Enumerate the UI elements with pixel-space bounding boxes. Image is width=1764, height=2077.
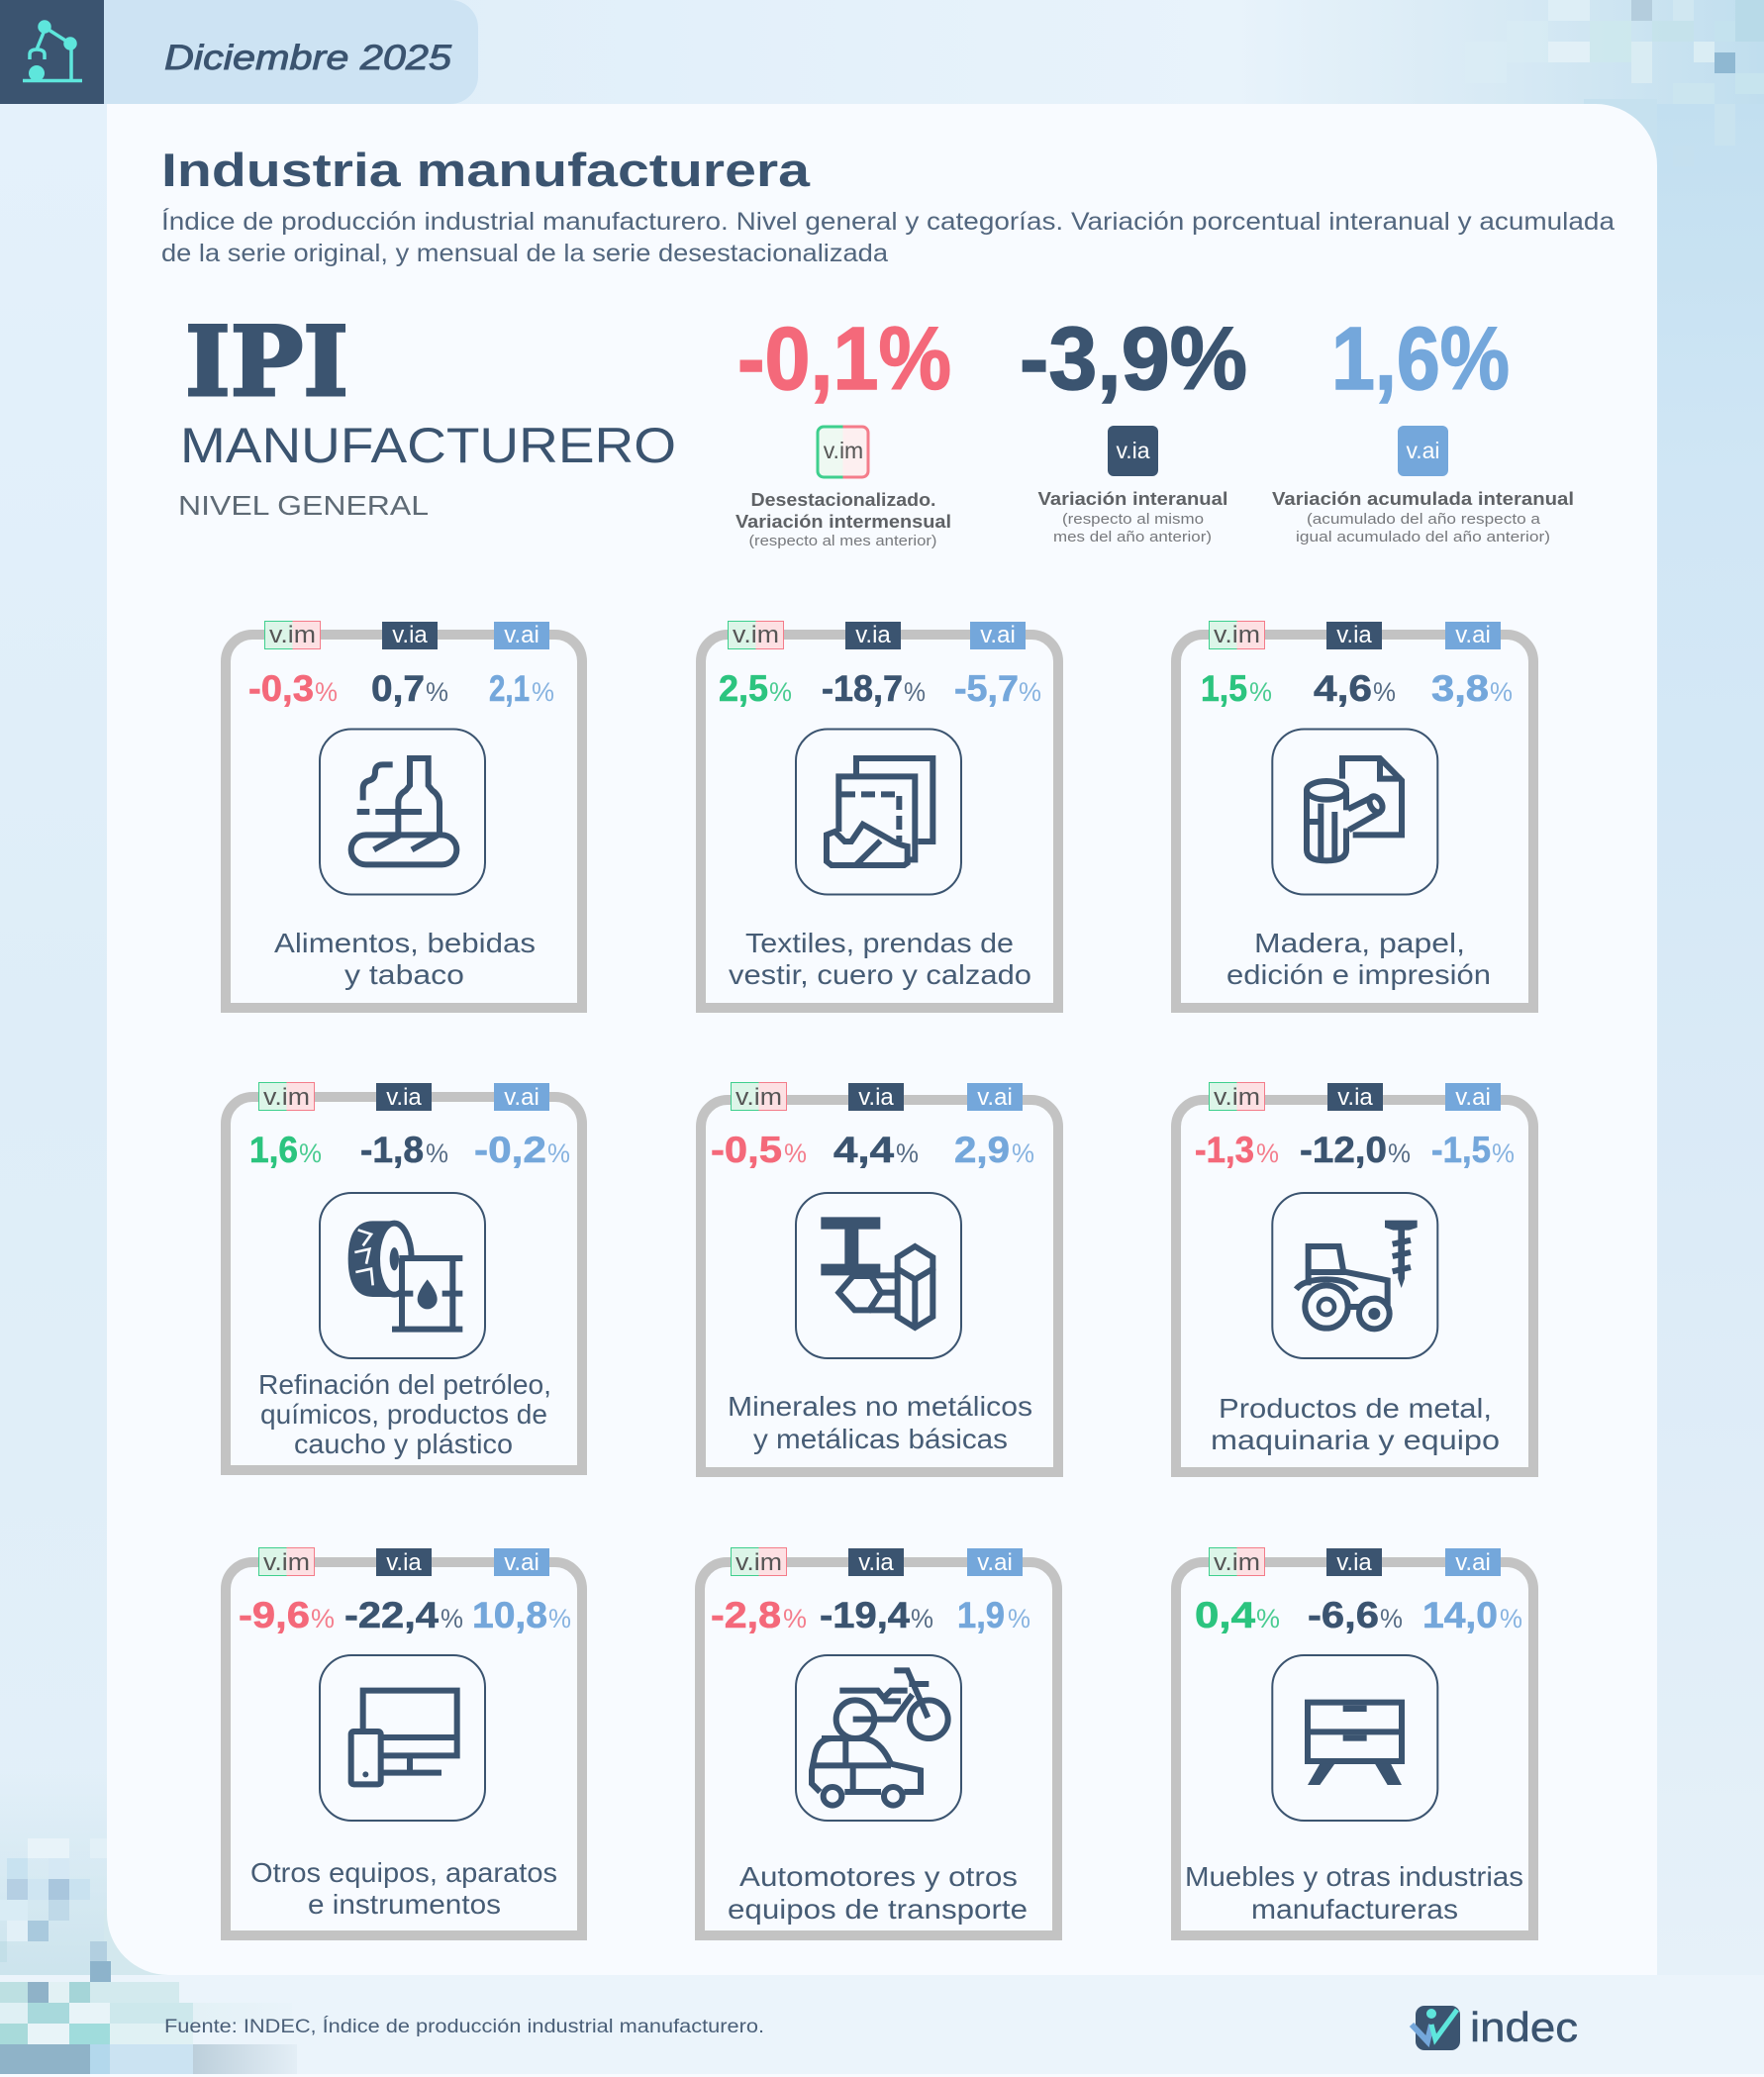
headline indicator: v.ai: Variación acumulada interanual: [1272, 489, 1574, 509]
values: -1,5: [1431, 1130, 1491, 1170]
values: %: [1490, 677, 1513, 707]
label: y metálicas básicas: [753, 1424, 1008, 1454]
values: 2,9: [954, 1130, 1010, 1170]
label: [274, 928, 536, 990]
headline indicator: v.im: Desestacionalizado.: [750, 490, 936, 510]
panel: Textiles, prendas de vestir, cuero y calzado: [701, 622, 1058, 1008]
values: %: [1249, 677, 1272, 707]
label: vestir, cuero y calzado: [729, 959, 1031, 990]
values: %: [1012, 1138, 1034, 1168]
values: [1195, 1595, 1522, 1635]
values: [248, 668, 554, 709]
values: %: [1373, 677, 1396, 707]
label: y tabaco: [344, 959, 464, 990]
badges: v.ai: [977, 1084, 1013, 1111]
badges: [731, 1548, 1023, 1576]
values: %: [1256, 1604, 1280, 1633]
label: [258, 1369, 551, 1459]
icon: motorcycle and car: [796, 1655, 961, 1821]
values: 3,8: [1431, 668, 1489, 709]
values: %: [315, 677, 338, 707]
values: -5,7: [954, 668, 1019, 709]
headline indicator: v.ia: mes del año anterior): [1053, 529, 1212, 545]
subtitle: de la serie original, y mensual de la serie desestacionalizada: [161, 240, 888, 267]
badges: v.ia: [386, 1084, 422, 1111]
values: 2,1: [489, 668, 530, 709]
badges: [1210, 1548, 1501, 1576]
values: [711, 1595, 1030, 1635]
headline indicator: v.ia: (respecto al mismo: [1062, 511, 1204, 528]
panel: Refinación del petróleo: [226, 1083, 582, 1470]
values: [249, 1130, 570, 1170]
panel: Madera, papel, edición e impresión: [1176, 622, 1533, 1008]
label: Productos de metal,: [1219, 1393, 1492, 1424]
values: 0,7: [371, 668, 425, 709]
headline indicator: v.ia: Variación interanual: [1037, 489, 1227, 509]
label: Alimentos, bebidas: [274, 928, 536, 958]
label: Automotores y otros: [739, 1861, 1018, 1892]
badges: v.ai: [504, 1549, 539, 1576]
badges: v.ia: [855, 622, 891, 648]
values: %: [1256, 1138, 1279, 1168]
badges: [1210, 1083, 1501, 1111]
icon: tractor and screw: [1272, 1193, 1437, 1358]
values: -1,8: [360, 1130, 424, 1170]
label: Otros equipos, aparatos: [250, 1857, 557, 1888]
values: %: [426, 1138, 448, 1168]
logo: indec: indec: [1470, 2004, 1578, 2050]
values: [719, 668, 1041, 709]
heading: IPI manufacturero nivel general: [178, 306, 676, 521]
values: %: [532, 677, 554, 707]
badges: v.ai: [1455, 622, 1491, 648]
source note: Fuente: INDEC, Índice de producción industrial manufacturero.: [164, 2017, 764, 2037]
values: %: [784, 1138, 807, 1168]
main panel: [107, 104, 1657, 1975]
badges: v.im: [1214, 1084, 1260, 1111]
values: -1,3: [1195, 1130, 1254, 1170]
label: equipos de transporte: [728, 1894, 1028, 1925]
values: -0,3: [248, 668, 314, 709]
label: manufactureras: [1251, 1894, 1458, 1925]
badges: v.ia: [1336, 1549, 1372, 1576]
icon: bottle, wheat and bread: [320, 729, 485, 895]
headline indicator: v.ia: [1020, 310, 1247, 545]
values: 2,5: [719, 668, 768, 709]
badges: v.im: [735, 1084, 782, 1111]
values: [239, 1595, 571, 1635]
headline indicator: v.im: Variación intermensual: [735, 512, 951, 532]
badges: v.ai: [504, 622, 539, 648]
panel: Automotores y otros equipos de transporte: [700, 1548, 1057, 1935]
header: icon square: [0, 0, 104, 104]
values: %: [1019, 677, 1041, 707]
badges: [729, 622, 1026, 649]
title: Industria manufacturera: [161, 144, 811, 196]
values: -2,8: [711, 1595, 781, 1635]
values: %: [548, 1604, 571, 1633]
values: %: [1388, 1138, 1411, 1168]
badges: v.im: [1214, 1549, 1260, 1576]
label: [728, 1391, 1032, 1454]
badges: [731, 1083, 1023, 1111]
icon: tire and barrel: [320, 1193, 485, 1358]
headline indicator: v.ai: [1272, 310, 1574, 545]
subtitle: Índice de producción industrial manufacturero. Nivel general y categorías. Variación porcentual interanual y acumulada: [161, 207, 1615, 236]
values: 10,8: [472, 1595, 547, 1635]
headline indicator: v.im: v.im: [824, 438, 863, 463]
badges: v.ai: [1455, 1549, 1491, 1576]
subtitle: [161, 207, 1615, 267]
badges: v.ia: [858, 1084, 894, 1111]
values: 0,4: [1195, 1595, 1255, 1635]
values: -22,4: [344, 1595, 439, 1635]
badges: v.ai: [1455, 1084, 1491, 1111]
values: -9,6: [239, 1595, 310, 1635]
badges: v.ia: [386, 1549, 422, 1576]
values: 1,5: [1201, 668, 1247, 709]
label: edición e impresión: [1226, 959, 1491, 990]
icon: fabric and shoe: [796, 729, 961, 895]
badges: v.ia: [858, 1549, 894, 1576]
badges: v.im: [1214, 622, 1260, 648]
headline indicator: v.ia: -3,9%: [1020, 310, 1247, 409]
values: [1201, 668, 1513, 709]
heading: IPI manufacturero nivel general: IPI: [185, 306, 348, 418]
badges: v.im: [733, 622, 779, 648]
values: -0,5: [711, 1130, 782, 1170]
label: [1185, 1861, 1523, 1925]
headline indicator: v.ai: 1,6%: [1331, 310, 1510, 409]
icon: robotic arm: [23, 22, 82, 81]
values: %: [299, 1138, 322, 1168]
bottom left pixel mosaic: [0, 1838, 317, 2074]
values: -6,6: [1308, 1595, 1379, 1635]
footer band: [0, 1975, 1764, 2074]
values: [711, 1130, 1034, 1170]
icon: cabinet: [1272, 1655, 1437, 1821]
top right pixel mosaic: [1465, 0, 1764, 166]
values: %: [1008, 1604, 1030, 1633]
badges: v.ia: [392, 622, 428, 648]
badges: v.ia: [1336, 622, 1372, 648]
badges: [259, 1083, 549, 1111]
panel: Minerales no metálicos: [701, 1083, 1058, 1472]
label: Refinación del petróleo,: [258, 1369, 551, 1400]
heading: IPI manufacturero nivel general: MANUFACTURERO: [180, 418, 676, 473]
values: -12,0: [1300, 1130, 1387, 1170]
panel: Productos de metal: [1176, 1083, 1533, 1472]
values: %: [441, 1604, 463, 1633]
heading: IPI manufacturero nivel general: NIVEL GENERAL: [178, 490, 429, 521]
headline indicator: v.im: (respecto al mes anterior): [748, 533, 936, 549]
values: %: [896, 1138, 919, 1168]
panel: Alimentos, bebidas y tabaco: [226, 622, 582, 1008]
values: %: [547, 1138, 570, 1168]
badges: v.ai: [980, 622, 1016, 648]
values: 14,0: [1422, 1595, 1498, 1635]
header: date tab: Diciembre 2025: [164, 39, 452, 77]
logo: indec: [1412, 2004, 1578, 2050]
headline indicator: v.ai: igual acumulado del año anterior): [1296, 529, 1550, 545]
values: %: [426, 677, 448, 707]
values: 1,9: [957, 1595, 1005, 1635]
label: [728, 1861, 1028, 1925]
headline indicator: v.im: [735, 310, 951, 549]
badges: v.ai: [977, 1549, 1013, 1576]
label: Muebles y otras industrias: [1185, 1861, 1523, 1892]
panel: Otros equipos: [226, 1548, 582, 1935]
label: caucho y plástico: [294, 1429, 513, 1459]
values: %: [904, 677, 926, 707]
values: -18,7: [822, 668, 903, 709]
label: Madera, papel,: [1254, 928, 1465, 958]
badges: v.ai: [504, 1084, 539, 1111]
label: [1226, 928, 1491, 990]
badges: v.im: [263, 1084, 310, 1111]
badges: v.im: [269, 622, 316, 648]
label: maquinaria y equipo: [1211, 1425, 1500, 1455]
badges: [259, 1548, 549, 1576]
label: químicos, productos de: [260, 1399, 547, 1430]
values: 4,4: [833, 1130, 894, 1170]
values: %: [911, 1604, 933, 1633]
label: e instrumentos: [308, 1889, 501, 1920]
values: %: [311, 1604, 335, 1633]
values: %: [1500, 1604, 1522, 1633]
headline indicator: v.im: -0,1%: [737, 310, 951, 409]
values: %: [1380, 1604, 1403, 1633]
label: [729, 928, 1031, 990]
headline indicator: v.ai: v.ai: [1406, 438, 1440, 463]
icon: log and paper: [1272, 729, 1437, 895]
badges: v.ia: [1337, 1084, 1373, 1111]
label: Minerales no metálicos: [728, 1391, 1032, 1422]
badges: [265, 622, 549, 649]
label: [250, 1857, 557, 1920]
icon: monitor and phone: [320, 1655, 485, 1821]
headline indicator: v.ai: (acumulado del año respecto a: [1307, 511, 1541, 528]
values: 1,6: [249, 1130, 298, 1170]
label: Textiles, prendas de: [745, 928, 1014, 958]
header: date tab: [104, 0, 478, 104]
headline indicator: v.ia: v.ia: [1116, 438, 1150, 463]
label: [1211, 1393, 1500, 1455]
values: -19,4: [820, 1595, 910, 1635]
badges: [1210, 622, 1501, 649]
values: [1195, 1130, 1515, 1170]
values: %: [769, 677, 792, 707]
values: %: [1492, 1138, 1515, 1168]
panel: Muebles y otras industrias manufactureras: [1176, 1548, 1533, 1935]
values: %: [783, 1604, 807, 1633]
values: 4,6: [1314, 668, 1372, 709]
badges: v.im: [263, 1549, 310, 1576]
badges: v.im: [735, 1549, 782, 1576]
icon: beam and minerals: [796, 1193, 961, 1358]
values: -0,2: [474, 1130, 546, 1170]
